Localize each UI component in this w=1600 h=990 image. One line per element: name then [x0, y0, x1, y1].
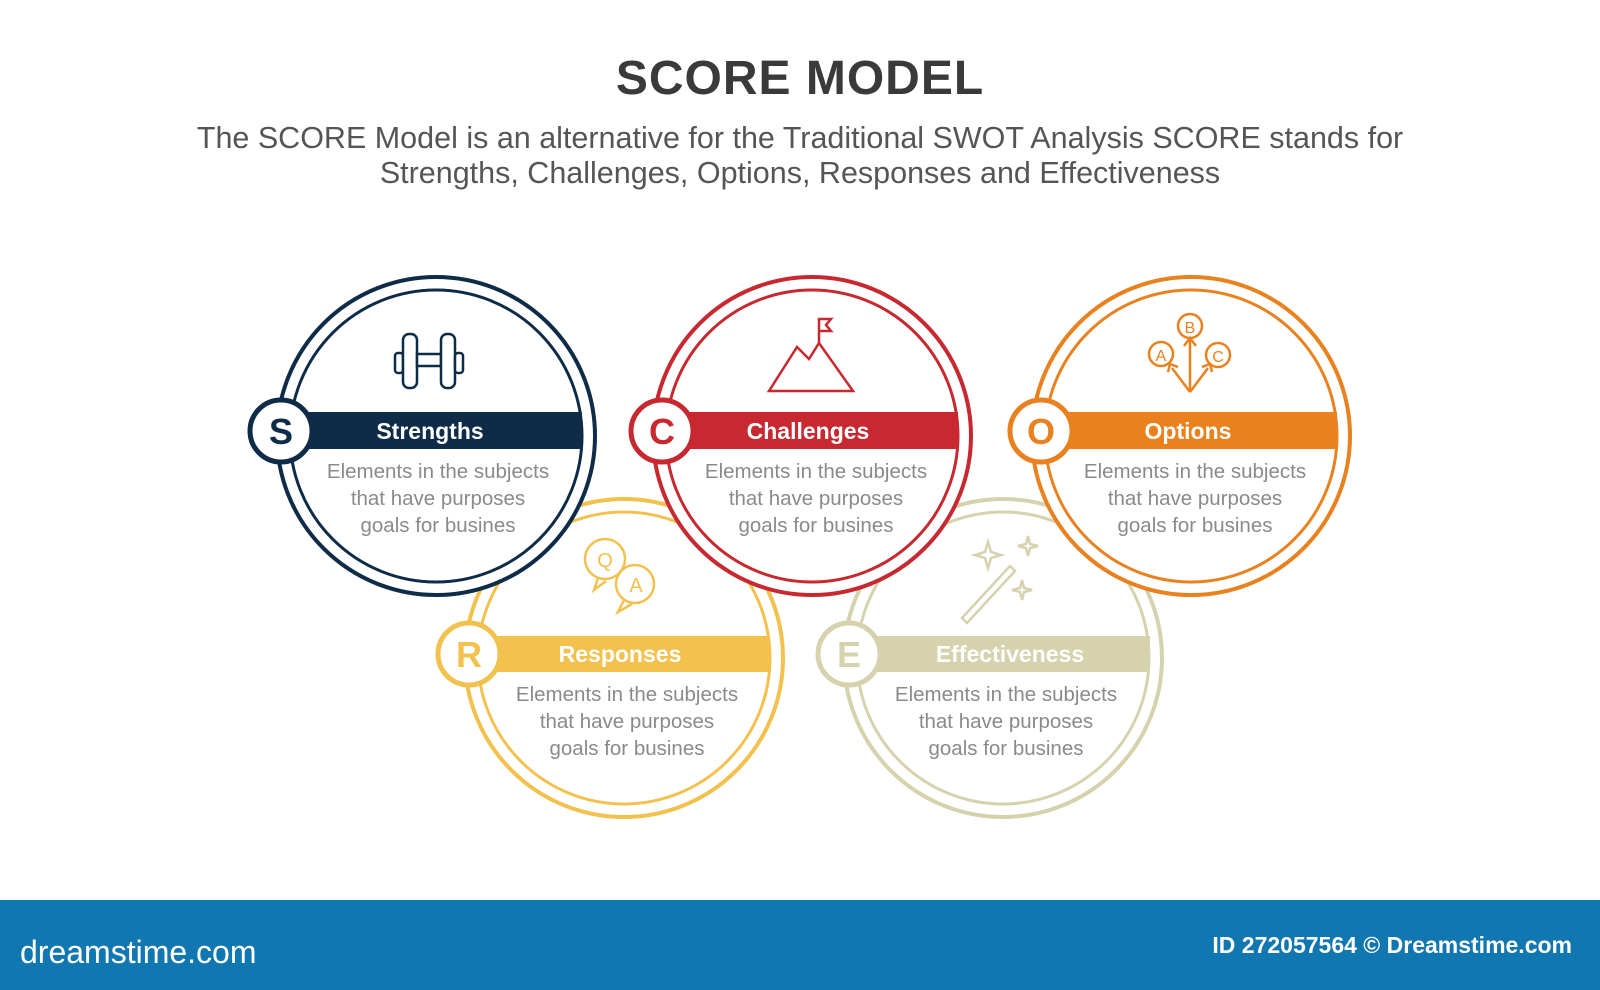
icon: Q&A bubbles [585, 539, 654, 612]
icon: Q&A bubbles: Q [597, 550, 613, 572]
icon: mountain flag [769, 319, 853, 391]
panel: strengths: S [269, 411, 293, 452]
panel: strengths: goals for busines [361, 514, 515, 537]
icon: ABC arrows [1149, 314, 1230, 392]
panel: challenges [631, 277, 971, 595]
panel: challenges: C [649, 411, 675, 452]
icon: dumbbell [395, 334, 463, 388]
panel: responses: Elements in the subjects [516, 683, 738, 706]
panel: strengths [250, 277, 595, 595]
panel: effectiveness: E [837, 634, 861, 675]
panel: options: goals for busines [1118, 514, 1272, 537]
panel: responses [438, 499, 783, 817]
panel: options: Elements in the subjects [1084, 460, 1306, 483]
panel: options: O [1027, 411, 1055, 452]
panel: options: Options [1145, 418, 1231, 444]
panel: effectiveness: Effectiveness [936, 641, 1084, 667]
subtitle [197, 121, 1403, 190]
panel: effectiveness [818, 499, 1162, 817]
panel: strengths: Strengths [376, 418, 484, 444]
panel: options [1010, 277, 1350, 595]
footer bar: dreamstime.com [20, 934, 256, 970]
panel: effectiveness: that have purposes [919, 710, 1093, 733]
icon: ABC arrows: A [1156, 348, 1167, 365]
panel: responses: Responses [559, 641, 681, 667]
panel: effectiveness: goals for busines [929, 737, 1083, 760]
panel: challenges: Elements in the subjects [705, 460, 927, 483]
panel: challenges: that have purposes [729, 487, 903, 510]
panel: responses: R [456, 634, 482, 675]
panel: options: that have purposes [1108, 487, 1282, 510]
icon: ABC arrows: C [1212, 349, 1224, 366]
panel: challenges: Challenges [747, 418, 869, 444]
panel: responses: goals for busines [550, 737, 704, 760]
icon: Q&A bubbles: A [629, 575, 643, 597]
subtitle: Strengths, Challenges, Options, Responses and Effectiveness [380, 156, 1220, 190]
footer bar: ID 272057564 © Dreamstime.com [1212, 932, 1572, 958]
icon: ABC arrows: B [1185, 320, 1195, 337]
icon: magic wand [962, 536, 1038, 623]
panel: responses: that have purposes [540, 710, 714, 733]
panel: strengths: that have purposes [351, 487, 525, 510]
subtitle: The SCORE Model is an alternative for the Traditional SWOT Analysis SCORE stands for [197, 121, 1403, 155]
panel: challenges: goals for busines [739, 514, 893, 537]
panel: strengths: Elements in the subjects [327, 460, 549, 483]
panel: effectiveness: Elements in the subjects [895, 683, 1117, 706]
footer bar [0, 900, 1600, 990]
title: SCORE MODEL [616, 52, 984, 105]
